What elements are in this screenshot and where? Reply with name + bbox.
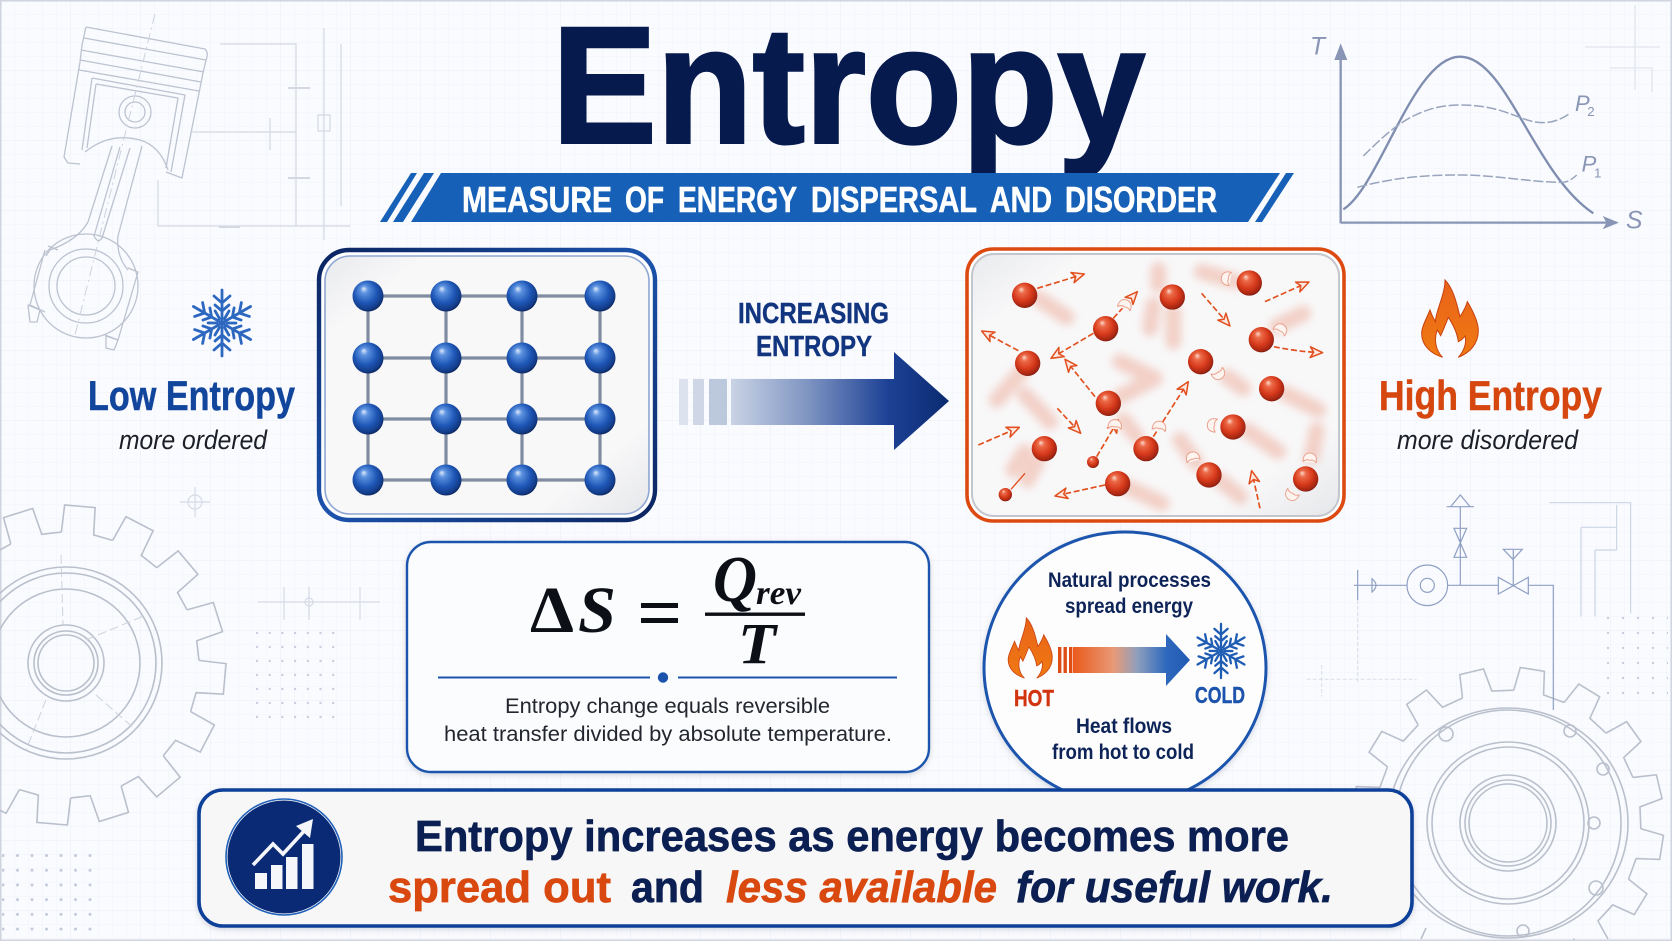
label: low entropy: Low Entropy: [88, 372, 296, 419]
formula explanation: [444, 694, 892, 746]
sketch: valve schematic: [1307, 495, 1631, 710]
icon: rising chart: [226, 799, 342, 915]
sketch: dimension lines: [158, 28, 350, 240]
subtitle ribbon: ENERGY: [678, 179, 797, 220]
formula: Q: [713, 543, 757, 616]
panel: heat flow circle: from hot to cold: [1052, 741, 1194, 764]
takeaway text: spread out: [388, 863, 611, 912]
label: high entropy: [1379, 372, 1603, 455]
subtitle ribbon: [380, 173, 1294, 222]
panel: heat flow circle: spread energy: [1065, 595, 1193, 618]
formula: rev: [756, 575, 802, 612]
panel: entropy formula: [407, 542, 929, 772]
panel: key takeaway: [199, 790, 1412, 926]
label: low entropy: [88, 372, 296, 455]
subtitle ribbon: DISPERSAL: [811, 179, 977, 220]
sketch: T-S diagram: 1: [1594, 165, 1601, 180]
arrow: hot to cold: [1058, 634, 1190, 686]
takeaway text: Entropy increases as energy becomes more: [415, 812, 1289, 861]
icon: small flame: [1008, 618, 1052, 678]
sketch: T-S diagram: [1310, 33, 1643, 235]
swirl marks: [1108, 271, 1317, 503]
panel: heat flow circle: Natural processes: [1048, 569, 1211, 592]
subtitle ribbon: DISORDER: [1065, 179, 1217, 220]
icon: small snowflake: [1194, 624, 1248, 678]
panel: ordered lattice: [319, 250, 655, 520]
sketch: dot grids and crosshairs: [2, 487, 1668, 936]
takeaway text: for useful work.: [1016, 863, 1333, 912]
takeaway text: and: [631, 863, 704, 912]
formula: Δ: [530, 574, 574, 647]
panel: heat flow circle: Heat flows: [1076, 715, 1172, 738]
motion trails: [997, 270, 1318, 503]
velocity arrows: [978, 274, 1323, 508]
arrow: increasing entropy: ENTROPY: [756, 331, 872, 363]
sketch: T-S diagram: T: [1310, 33, 1327, 60]
subtitle ribbon: AND: [990, 179, 1052, 220]
panel: heat flow circle: COLD: [1195, 682, 1245, 708]
formula: S: [578, 574, 616, 647]
label: low entropy: more ordered: [119, 425, 268, 455]
takeaway text: less available: [726, 863, 997, 912]
formula: [530, 543, 805, 676]
label: high entropy: more disordered: [1397, 425, 1579, 455]
arrow: increasing entropy: [679, 298, 949, 450]
subtitle ribbon: MEASURE: [462, 179, 612, 220]
sketch: T-S diagram: P: [1575, 91, 1590, 116]
panel: heat flow circle: HOT: [1014, 685, 1054, 711]
label: high entropy: High Entropy: [1379, 372, 1603, 419]
panel: heat flow circle: [984, 532, 1266, 804]
sketch: top right corner marks: [1585, 5, 1660, 92]
arrow: increasing entropy: INCREASING: [738, 298, 889, 330]
icon: flame (high entropy): [1422, 280, 1478, 357]
formula explanation: Entropy change equals reversible: [505, 694, 830, 718]
subtitle ribbon: OF: [625, 179, 664, 220]
formula explanation: heat transfer divided by absolute temperature.: [444, 722, 892, 746]
sketch: right gear: [1333, 643, 1672, 941]
sketch: T-S diagram: 2: [1587, 104, 1595, 119]
panel: disordered particles: [967, 249, 1344, 521]
lattice atoms: [352, 280, 616, 496]
sketch: left gear: [0, 491, 240, 839]
sketch: T-S diagram: S: [1626, 208, 1643, 235]
divider: [438, 672, 897, 683]
takeaway text: [388, 812, 1333, 912]
sketch: piston and connecting rod: [28, 14, 207, 350]
particles: [999, 270, 1318, 501]
sketch: T-S diagram: P: [1582, 151, 1597, 176]
icon: snowflake (low entropy): [189, 290, 255, 356]
formula: T: [738, 611, 779, 676]
